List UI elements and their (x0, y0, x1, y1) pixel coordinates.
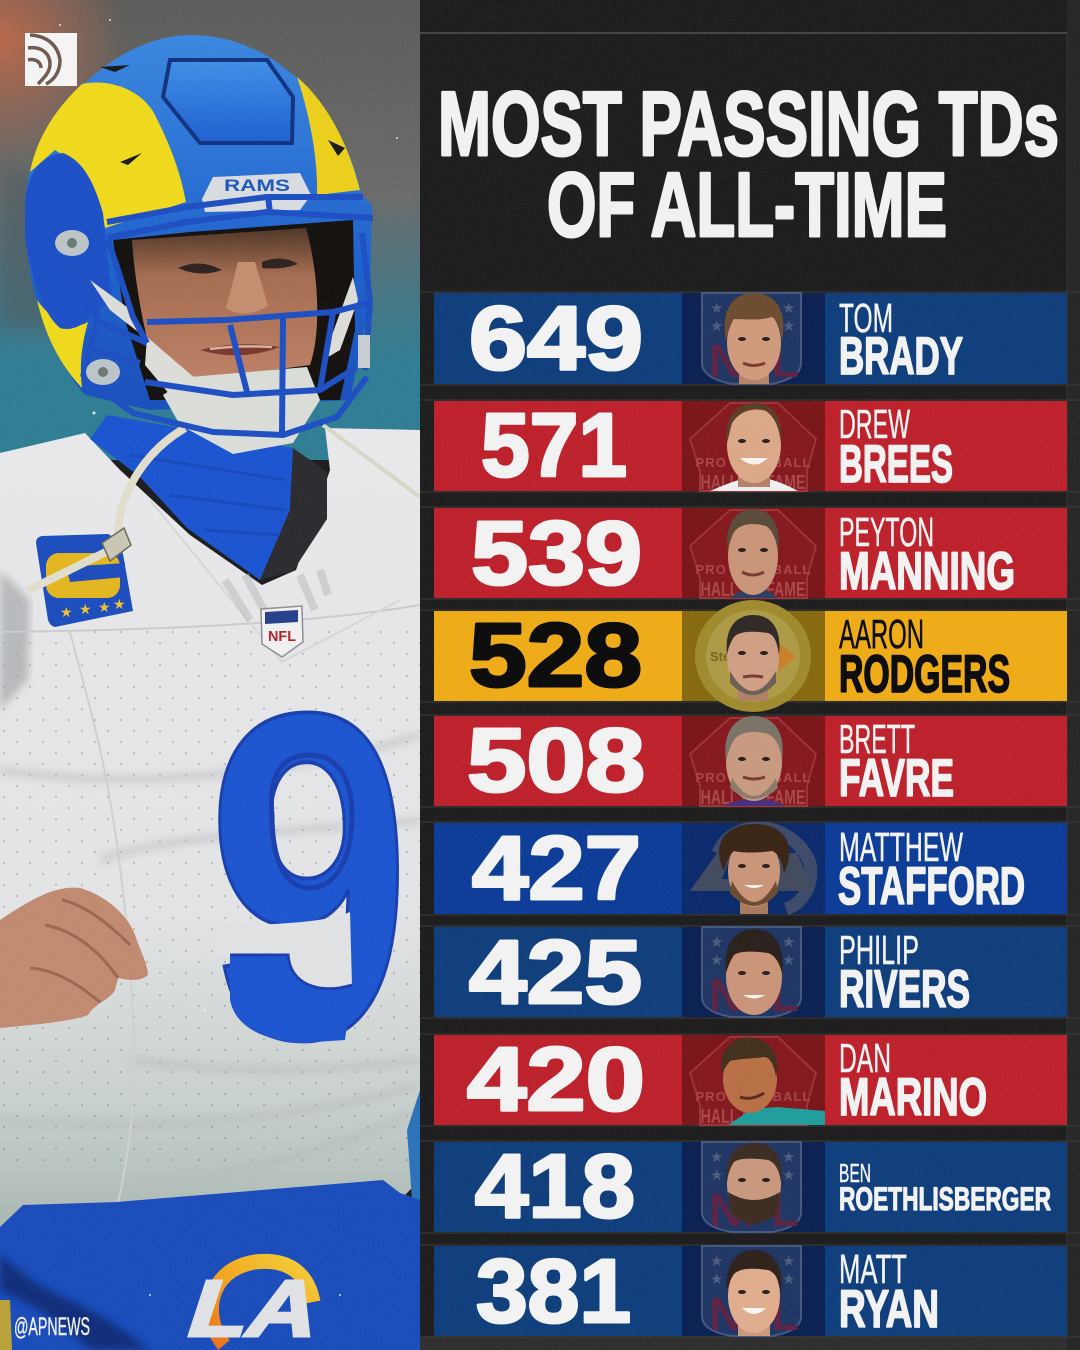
NFL shield crest (261, 606, 303, 657)
photo: Favre (682, 716, 825, 809)
row: Philip Rivers: 425 (469, 923, 642, 1023)
row: Dan Marino: 420 (467, 1030, 645, 1130)
photo: Brady: ★ (710, 318, 723, 335)
row: Philip Rivers: PHILIP (839, 927, 919, 973)
photo: Roethlisberger (682, 1142, 825, 1236)
helmet pads (90, 277, 358, 395)
row: Peyton Manning (434, 504, 1067, 604)
row: Ben Roethlisberger: 418 (475, 1137, 635, 1237)
decorative specks (59, 19, 398, 1296)
photo: Brady: ★ (782, 300, 795, 317)
neck equipment (260, 448, 327, 580)
row: Peyton Manning: 539 (471, 504, 642, 604)
face (132, 228, 317, 385)
photo: Rivers: ★ (782, 952, 795, 969)
row: Drew Brees: BREES (839, 435, 953, 494)
photo: Rodgers (682, 600, 825, 712)
row: Aaron Rodgers: 528 (469, 606, 642, 706)
blue pants (0, 1180, 420, 1350)
captain patch: ★ (98, 599, 111, 615)
row: Matt Ryan (434, 1242, 1067, 1342)
photo: Manning (682, 508, 825, 601)
captain patch: ★ (113, 596, 126, 612)
face mask (55, 196, 373, 435)
photo: Roethlisberger: ★ (782, 1149, 795, 1166)
photo: Brady: ★ (782, 318, 795, 335)
photo: Rivers: NFL (709, 969, 799, 1021)
row: Peyton Manning: PEYTON (839, 509, 934, 555)
row: Brett Favre (434, 711, 1067, 811)
number 9 (218, 710, 399, 1044)
captain patch (36, 534, 133, 627)
captain patch: ★ (60, 604, 73, 620)
helmet shell (25, 35, 372, 410)
photo: Rodgers: Ste (710, 649, 730, 664)
photo background (0, 0, 420, 460)
photo: Brady (682, 293, 825, 387)
photo: Ryan: NFL (709, 1288, 799, 1340)
photo: Ryan: ★ (782, 1271, 795, 1288)
chin strap (27, 425, 420, 591)
photo: Brees (682, 401, 825, 494)
row: Ben Roethlisberger (434, 1137, 1067, 1237)
credit handle: @APNEWS (14, 1313, 90, 1341)
photo: Brady: ★ (710, 300, 723, 317)
blue horn (25, 153, 112, 329)
photo: Rivers: ★ (710, 952, 723, 969)
photo: Rivers: ★ (782, 934, 795, 951)
visor opening (113, 220, 355, 400)
photo: Roethlisberger: ★ (710, 1149, 723, 1166)
RAMS nameplate: RAMS (224, 176, 290, 195)
row: Drew Brees (434, 396, 1067, 496)
row: Tom Brady: 649 (469, 289, 643, 389)
NFL shield crest: NFL (268, 628, 296, 645)
photo: Ryan (682, 1246, 825, 1340)
jersey (0, 428, 420, 1235)
row: Philip Rivers (434, 923, 1067, 1023)
photo: Favre: HALL OF FAME (700, 787, 806, 809)
photo: Marino (682, 1035, 825, 1128)
helmet (25, 35, 373, 454)
photo: Marino: PRO FOOTBALL (696, 1089, 811, 1104)
yellow lower side (37, 300, 88, 388)
helmet vents (100, 65, 345, 165)
photo: Rivers (682, 927, 825, 1021)
row: Drew Brees: DREW (839, 401, 910, 447)
right side blue background sliver (407, 1090, 420, 1210)
photo: Ryan: ★ (782, 1253, 795, 1270)
photo: Ryan: ★ (710, 1253, 723, 1270)
row: Brett Favre: BRETT (839, 716, 915, 762)
photo: Stafford (682, 823, 825, 914)
row: Dan Marino: DAN (839, 1035, 891, 1081)
row: Matthew Stafford: 427 (472, 819, 641, 919)
row: Philip Rivers: RIVERS (839, 960, 970, 1019)
number 9: 9 (207, 616, 411, 1136)
yellow stripe right (297, 77, 360, 195)
photo: Brady: NFL (709, 335, 799, 387)
photo: Roethlisberger: ★ (782, 1167, 795, 1184)
row: Brett Favre: 508 (467, 711, 645, 811)
photo: Ryan: ★ (710, 1271, 723, 1288)
photo: Manning: PRO FOOTBALL (696, 562, 811, 577)
blue undershirt neck (90, 415, 293, 580)
row: Tom Brady: TOM (839, 295, 893, 341)
row: Matt Ryan: MATT (839, 1246, 907, 1292)
panel: player photo illustration (0, 0, 420, 1350)
row: Brett Favre: FAVRE (839, 749, 954, 808)
row: Drew Brees: 571 (481, 396, 627, 496)
photo: Marino: HALL OF FAME (700, 1106, 806, 1128)
photo: Manning: HALL OF FAME (700, 579, 806, 601)
row: Tom Brady (434, 289, 1067, 389)
hand (0, 888, 148, 1028)
captain patch: ★ (79, 601, 92, 617)
photo: Favre: PRO FOOTBALL (696, 770, 811, 785)
RAMS nameplate (202, 173, 311, 212)
helmet crown panel (163, 60, 293, 143)
title (438, 74, 1059, 256)
row: Tom Brady: BRADY (839, 327, 963, 386)
row: Ben Roethlisberger: BEN (839, 1158, 871, 1188)
side clips (55, 230, 370, 385)
photo: Brees: HALL OF FAME (700, 472, 806, 494)
photo: Roethlisberger: ★ (710, 1167, 723, 1184)
photo: Brees: PRO FOOTBALL (696, 455, 811, 470)
row: Matt Ryan: RYAN (839, 1280, 939, 1339)
row: Matthew Stafford (434, 819, 1067, 919)
row: Dan Marino (434, 1030, 1067, 1130)
row: Aaron Rodgers (434, 600, 1067, 712)
photo: Roethlisberger: NFL (709, 1184, 799, 1236)
logo: lion badge (25, 33, 77, 86)
photo: Rivers: ★ (710, 934, 723, 951)
row: Dan Marino: MARINO (839, 1068, 987, 1127)
chin guard (163, 367, 320, 454)
row: Aaron Rodgers: AARON (839, 611, 924, 657)
row: Matt Ryan: 381 (476, 1242, 631, 1342)
row: Matthew Stafford: MATTHEW (839, 824, 963, 870)
yellow stripe left (30, 82, 186, 228)
